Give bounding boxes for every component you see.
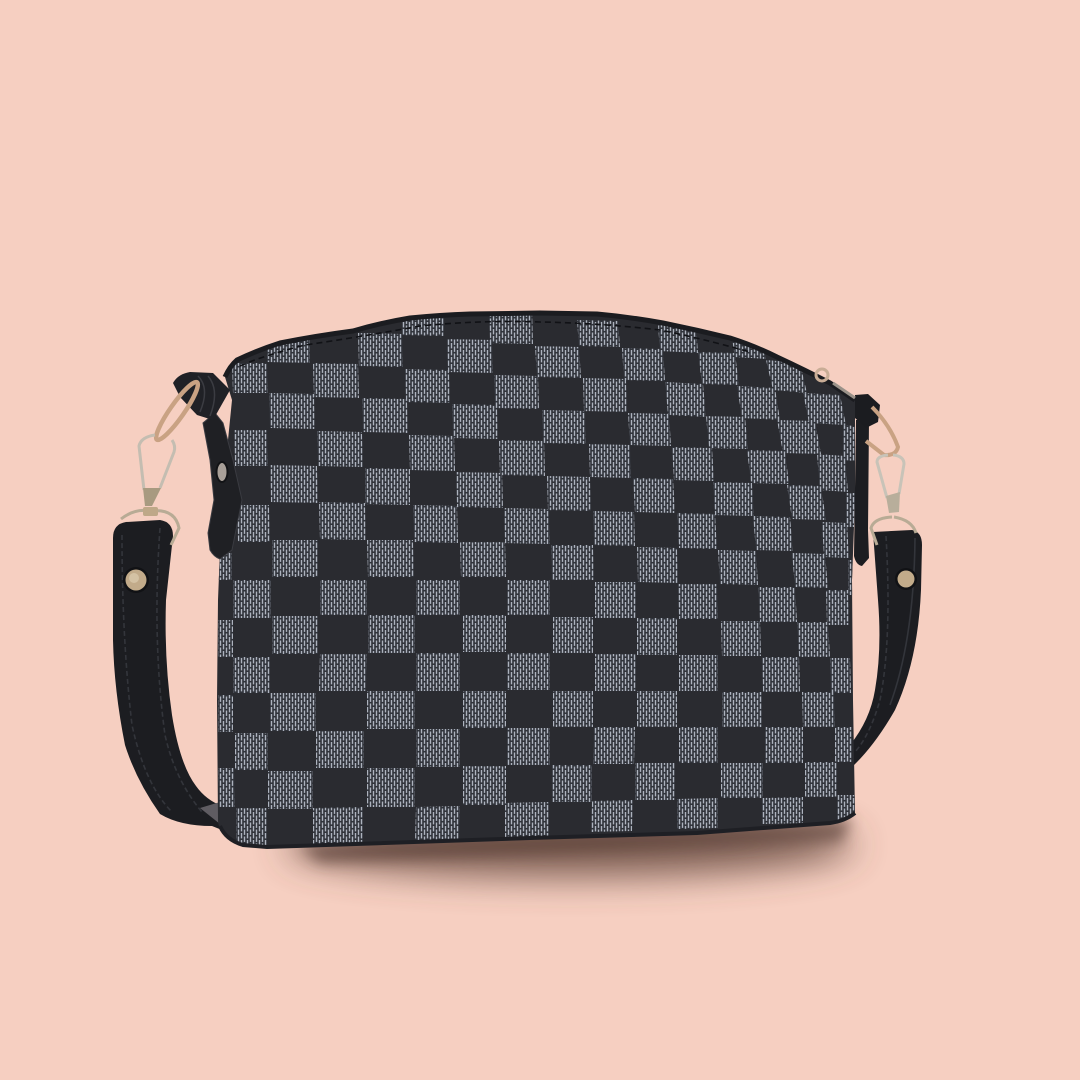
right shoulder strap [850, 530, 922, 766]
icon: left rivet [216, 462, 228, 482]
checker pattern: grey woven squares [218, 310, 855, 845]
ground shadow [285, 813, 855, 877]
left shoulder strap [113, 520, 222, 830]
product illustration: checkered crossbody bag on peach background [113, 310, 922, 902]
icon: right strap rivet [895, 568, 917, 590]
icon: left snap hook [121, 435, 179, 545]
right metal hardware [816, 369, 916, 545]
stitched seam [240, 322, 750, 366]
bag body [217, 310, 855, 847]
zipper along top edge [225, 313, 855, 400]
right side tab and knot [854, 394, 880, 566]
top connector strip [833, 383, 855, 398]
icon: left strap rivet [123, 567, 149, 593]
left side tab and knot [173, 372, 242, 559]
left metal hardware [121, 378, 203, 545]
bottom piping [220, 813, 855, 847]
dark leather base [217, 313, 855, 847]
icon: right snap hook [871, 455, 916, 545]
icon: small top ring [816, 369, 828, 381]
icon: right gold ring [866, 407, 898, 455]
icon: left gold ring [151, 378, 203, 444]
